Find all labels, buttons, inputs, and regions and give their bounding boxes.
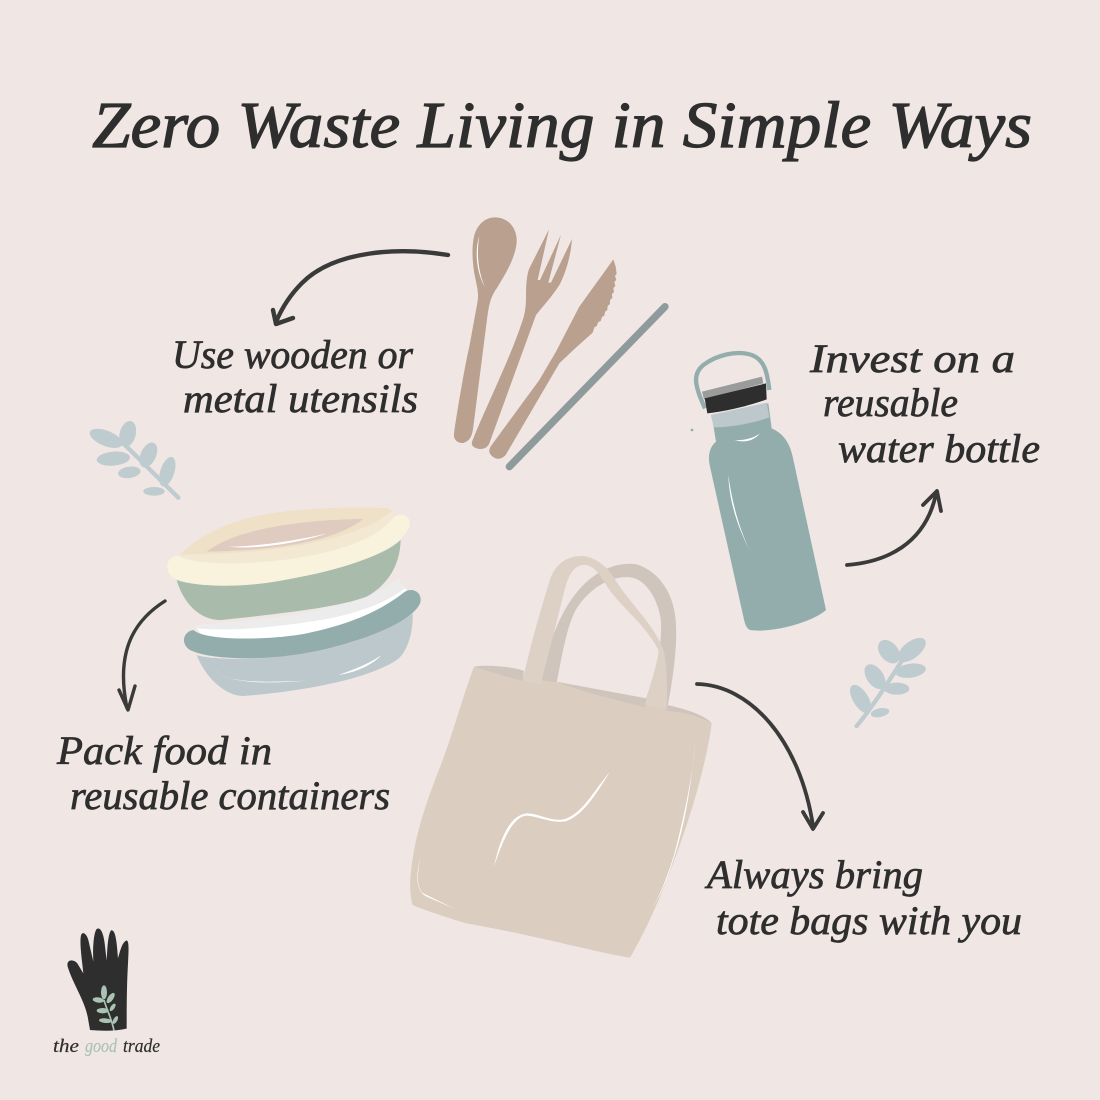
icon: upper container inside bbox=[207, 519, 363, 552]
illustration: water bottle bbox=[691, 353, 826, 631]
icon: upper container lid back bbox=[180, 507, 393, 564]
logo wordmark: the bbox=[53, 1036, 79, 1057]
icon: front handle bbox=[523, 556, 667, 710]
icon: lid top bbox=[702, 377, 763, 399]
illustration: stacked food containers bbox=[167, 507, 421, 696]
text: containers label bbox=[56, 728, 390, 818]
icon: fork bbox=[472, 229, 572, 449]
arrow: to utensils label bbox=[273, 251, 448, 324]
icon: lower container rim bbox=[184, 590, 421, 658]
text: containers label: Pack food in bbox=[56, 728, 272, 773]
icon: bag rim shading bbox=[474, 666, 712, 723]
bottle highlights bbox=[728, 433, 760, 549]
icon: bag body bbox=[410, 667, 712, 958]
text: bottle label bbox=[809, 336, 1040, 471]
bag highlights bbox=[417, 743, 695, 910]
logo: the good trade bbox=[53, 929, 160, 1057]
icon: bottle collar bbox=[711, 403, 769, 427]
illustration: tote bag bbox=[410, 556, 712, 958]
logo wordmark: trade bbox=[123, 1036, 160, 1057]
arrow: to containers label bbox=[119, 601, 165, 710]
icon: leaf sprig right bbox=[846, 633, 930, 726]
logo wordmark: good bbox=[85, 1036, 117, 1057]
text: tote label: Always bring bbox=[704, 852, 923, 897]
title: Zero Waste Living in Simple Ways bbox=[92, 89, 1032, 162]
icon: small dot bbox=[691, 429, 693, 431]
arrow: to tote label bbox=[697, 684, 823, 829]
text: tote label bbox=[704, 852, 1022, 943]
illustration: utensils bbox=[454, 217, 665, 467]
text: utensils label: metal utensils bbox=[183, 376, 418, 421]
icon: lower container bowl bbox=[197, 613, 413, 696]
icon: back handle bbox=[540, 564, 676, 708]
icon: upper container lid band bbox=[178, 510, 394, 566]
icon: metal straw bbox=[509, 307, 665, 467]
container highlights bbox=[213, 533, 382, 682]
text: tote label: tote bags with you bbox=[716, 898, 1022, 943]
icon: bottle handle bbox=[696, 353, 769, 408]
logo wordmark bbox=[53, 1036, 160, 1057]
arrow: to bottle label bbox=[847, 491, 941, 565]
icon: hand bbox=[67, 929, 129, 1031]
icon: leaf sprig left bbox=[87, 419, 179, 498]
icon: lower container inner bbox=[195, 578, 410, 642]
icon: bottle body bbox=[709, 403, 826, 631]
text: utensils label bbox=[172, 332, 418, 421]
text: containers label: reusable containers bbox=[70, 773, 390, 818]
icon: knife bbox=[489, 259, 617, 459]
text: utensils label: Use wooden or bbox=[172, 332, 413, 377]
icon: upper container lid rim bbox=[167, 515, 410, 586]
icon: bottle lid bbox=[705, 383, 767, 413]
icon: spoon bbox=[454, 217, 517, 443]
icon: upper container bowl bbox=[177, 540, 401, 620]
text: bottle label: Invest on a bbox=[809, 336, 1015, 381]
text: bottle label: reusable bbox=[823, 380, 958, 425]
text: bottle label: water bottle bbox=[838, 426, 1040, 471]
